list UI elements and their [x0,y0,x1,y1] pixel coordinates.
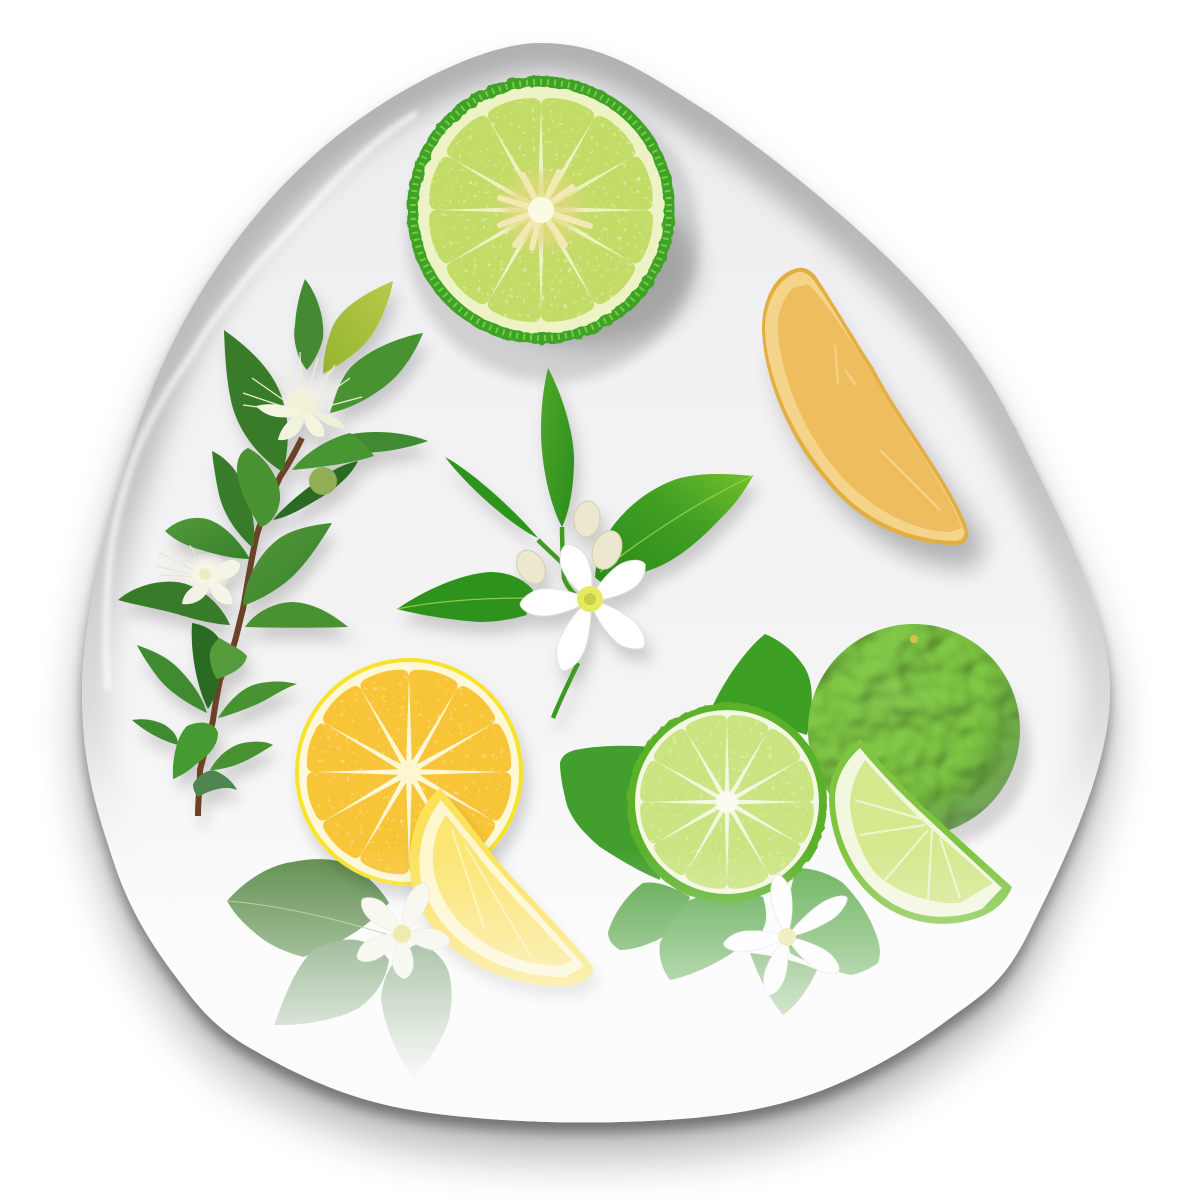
leaf: upper narrow [294,279,323,370]
myrtle flower small [155,545,240,604]
stem [198,438,302,816]
leaf: broad upper [237,448,280,527]
leaf: long right lower [245,602,348,628]
leaf: young yellow-green [323,281,393,374]
leaf: bottom broad [173,723,218,779]
bergamot half [627,703,827,903]
myrtle bud [309,467,337,495]
plate [82,43,1110,1156]
leaf: lower right [218,682,297,718]
leaf: bottom left small [132,719,178,745]
bergamot group [560,624,1030,1015]
leaf: long left [118,582,230,625]
stem [538,527,580,718]
leaf: lower left [137,645,207,713]
leaf: behind bud [273,461,358,520]
lemon wedge [410,788,594,986]
lemon leaves [227,859,452,1077]
leaf: bottom curled [193,770,237,797]
leaf: long right back [352,432,428,453]
lemon group flower [352,879,451,979]
bergamot leaves [560,634,880,1015]
leaf: left middle [165,518,250,559]
leaf: thin left [445,457,538,538]
big lime slice [407,76,699,382]
myrtle sprig [118,279,428,816]
leaf: bottom right [210,742,273,770]
leaf: upper right [330,333,423,413]
leaf: right middle [243,523,332,606]
orange wedge [762,268,985,568]
whole bergamot [808,624,1030,848]
leaf: long right front [292,433,374,470]
leaf: top [541,368,574,527]
lemon group [227,658,594,1077]
leaf: behind lower [192,623,222,709]
flower [519,539,653,675]
center orange blossom sprig [397,368,753,718]
bergamot group flower [722,873,853,998]
lemon slice [295,658,523,886]
leaf: lower left [397,572,533,622]
buds [511,500,627,589]
leaf: folded [210,638,247,679]
leaf: pointed left [212,451,254,548]
bottom fade over plate [145,860,1026,1122]
leaf: large upper left [224,330,288,472]
myrtle flower large [243,352,362,440]
bergamot wedge [829,739,1012,924]
leaf: right large [595,474,753,583]
